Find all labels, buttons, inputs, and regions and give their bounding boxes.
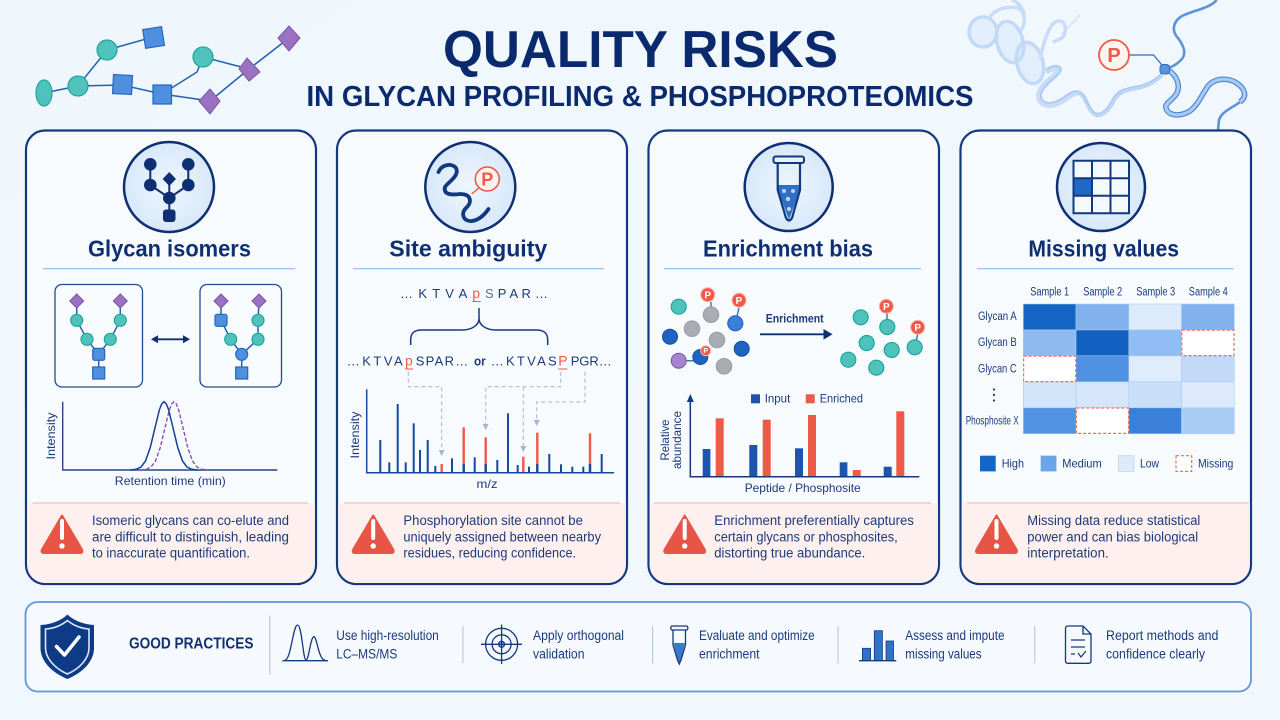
practice: report methods: confidence clearly: [1106, 646, 1205, 661]
callout: enrichment risk: [650, 503, 938, 583]
panel: enrichment bias: [648, 130, 939, 584]
icon: glycan tree: [124, 142, 214, 232]
decoration: glycan chain: [36, 26, 300, 114]
icon: warning: [976, 516, 1017, 553]
peptide sequence: … K T V A: [400, 286, 468, 301]
decoration: protein ribbon with phosphate: [969, 0, 1245, 130]
practice: assess missing values: [859, 628, 1004, 661]
chart: MS/MS spectrum: [348, 389, 614, 491]
chart: co-eluting peaks: Intensity: [44, 412, 58, 460]
peptide sequence: P A R …: [498, 286, 548, 301]
arrow: isomer exchange: [151, 335, 190, 343]
callout: missing risk: interpretation.: [1027, 546, 1109, 561]
enriched mixture: P: [883, 302, 890, 313]
practice: high-resolution LC-MS/MS: LC–MS/MS: [336, 646, 397, 661]
panel: site ambiguity: [337, 130, 627, 584]
input mixture: P: [736, 296, 743, 307]
practice: evaluate enrichment: enrichment: [699, 646, 760, 661]
practice: orthogonal validation: [481, 624, 624, 664]
legend: Missing: [1198, 456, 1233, 470]
practice: assess missing values: missing values: [905, 646, 982, 661]
practice: report methods: Report methods and: [1106, 628, 1218, 643]
callout: isomer risk: Isomeric glycans can co-elute and: [92, 513, 289, 528]
callout: enrichment risk: certain glycans or phosphosites,: [714, 530, 898, 545]
candidate sites: p: [405, 353, 413, 369]
brace: [411, 308, 548, 345]
chart: co-eluting peaks: Retention time (min): [115, 474, 226, 488]
enriched mixture: P: [914, 323, 921, 334]
chart: co-eluting peaks: [44, 402, 277, 488]
practice: orthogonal validation: Apply orthogonal: [533, 628, 624, 643]
icon: peptide with phosphate: [425, 142, 515, 232]
icon: peptide with phosphate: P: [481, 170, 493, 190]
candidate sites: [347, 353, 612, 369]
callout: isomer risk: [27, 503, 315, 583]
practice: evaluate enrichment: Evaluate and optimize: [699, 628, 815, 643]
glycan structure B: [200, 284, 282, 387]
arrow: enrichment: [760, 312, 832, 340]
callout: enrichment risk: distorting true abundance.: [714, 546, 865, 561]
chart: heatmap: Glycan C: [978, 363, 1017, 375]
chart: MS/MS spectrum: m/z: [476, 477, 498, 491]
chart: heatmap: Sample 1: [1030, 287, 1069, 299]
legend: Low: [1140, 456, 1159, 470]
callout: isomer risk: to inaccurate quantification.: [92, 546, 250, 561]
icon: phosphate label: [1099, 40, 1129, 70]
candidate sites: P: [558, 353, 568, 369]
callout: site risk: residues, reducing confidence.: [403, 546, 576, 561]
panel: glycan isomers: [26, 130, 316, 584]
practice: high-resolution LC-MS/MS: [282, 625, 439, 661]
input mixture: P: [704, 290, 711, 302]
chart: abundance bars: [658, 392, 919, 495]
enriched mixture: [841, 299, 925, 375]
chart: MS/MS spectrum: Intensity: [348, 412, 362, 458]
candidate sites: …KTVA: [347, 354, 403, 369]
arrows: site to fragment peaks: [408, 372, 585, 455]
legend: High: [1002, 456, 1024, 470]
callout: missing risk: [962, 503, 1250, 583]
subtitle: IN GLYCAN PROFILING & PHOSPHOPROTEOMICS: [306, 81, 974, 113]
candidate sites: PGR…: [571, 354, 612, 369]
legend: Medium: [1062, 456, 1102, 470]
callout: site risk: [338, 503, 626, 583]
arrow: enrichment: Enrichment: [766, 312, 824, 326]
candidate sites: SPAR…: [416, 354, 468, 369]
candidate sites: or: [474, 355, 486, 369]
legend: [980, 456, 1233, 471]
callout: site risk: Phosphorylation site cannot be: [403, 513, 583, 528]
peptide sequence: p: [472, 285, 480, 301]
practice: evaluate enrichment: [671, 626, 815, 664]
practice: report methods: [1066, 626, 1218, 663]
practice: high-resolution LC-MS/MS: Use high-resolution: [336, 628, 439, 643]
chart: heatmap: Sample 3: [1136, 287, 1175, 299]
callout: enrichment risk: Enrichment preferentially captures: [714, 513, 914, 528]
glycan structure A: [55, 284, 142, 387]
title: QUALITY RISKS: [443, 21, 838, 79]
callout: site risk: uniquely assigned between nearby: [403, 530, 601, 545]
icon: warning: [664, 516, 705, 553]
chart: heatmap: [966, 287, 1234, 434]
peptide sequence: S: [485, 286, 494, 301]
heading: Glycan isomers: [88, 236, 251, 262]
icon: warning: [42, 516, 82, 553]
icon: shield: [40, 614, 94, 679]
practice: assess missing values: Assess and impute: [905, 628, 1004, 643]
input mixture: [662, 288, 749, 374]
chart: abundance bars: Enriched: [820, 392, 863, 406]
panel: good practices: [26, 602, 1251, 692]
panel: missing values: [960, 130, 1251, 584]
icon: data grid: [1057, 143, 1145, 231]
chart: heatmap: Glycan B: [978, 337, 1017, 349]
heading: good practices: GOOD PRACTICES: [129, 635, 254, 652]
icon: sample tube: [745, 143, 833, 231]
icon: phosphate label: P: [1107, 45, 1121, 67]
chart: abundance bars: abundance: [670, 411, 684, 469]
candidate sites: …KTVAS: [491, 354, 557, 369]
chart: abundance bars: Peptide / Phosphosite: [745, 481, 861, 495]
chart: heatmap: Sample 2: [1083, 287, 1122, 299]
chart: abundance bars: Relative: [658, 419, 672, 460]
chart: abundance bars: Input: [765, 392, 791, 406]
chart: heatmap: Phosphosite X: [966, 416, 1019, 428]
heading: Missing values: [1028, 236, 1179, 262]
chart: heatmap: Sample 4: [1189, 287, 1228, 299]
icon: warning: [353, 516, 394, 553]
callout: isomer risk: are difficult to distinguish, leading: [92, 530, 289, 545]
chart: heatmap: Glycan A: [978, 311, 1017, 323]
practice: orthogonal validation: validation: [533, 646, 584, 661]
callout: missing risk: Missing data reduce statistical: [1027, 513, 1200, 528]
heading: Enrichment bias: [703, 236, 873, 262]
input mixture: P: [703, 348, 708, 355]
callout: missing risk: power and can bias biological: [1027, 530, 1198, 545]
peptide sequence: [400, 285, 548, 302]
heading: Site ambiguity: [389, 236, 547, 262]
